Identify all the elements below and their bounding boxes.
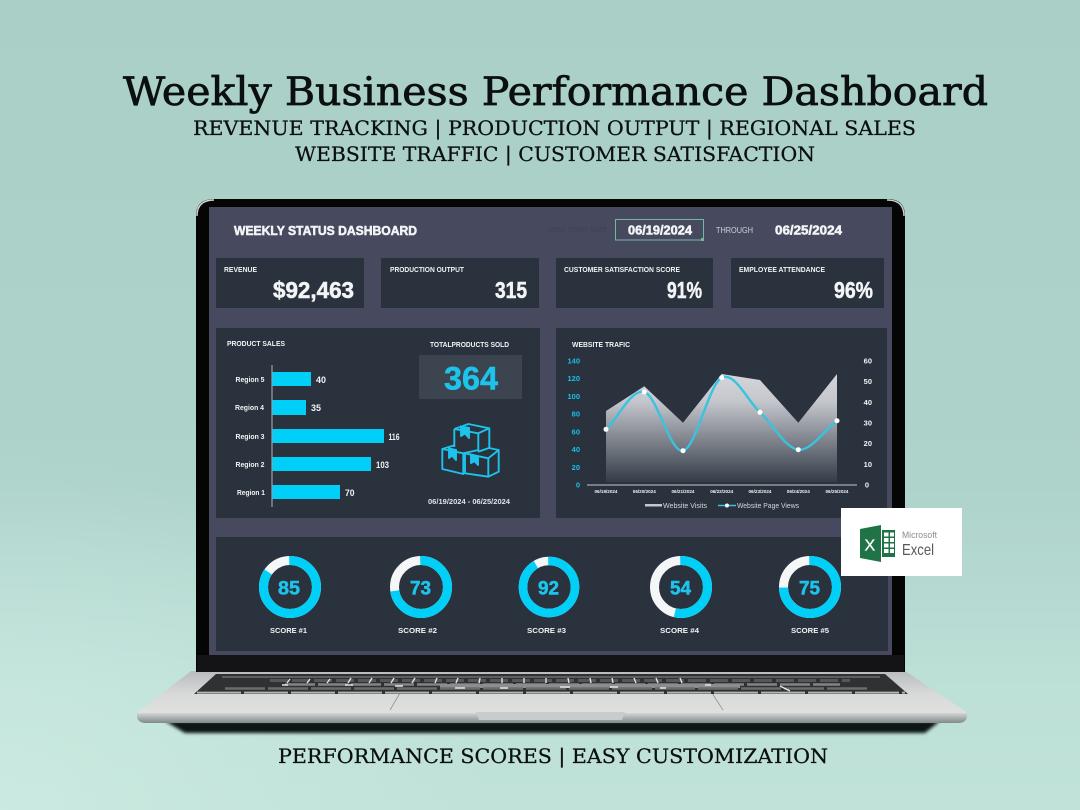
bar chart: 40 — [316, 375, 326, 386]
KPI: production output: PRODUCTION OUTPUT — [390, 267, 465, 274]
KPI: customer satisfaction: 91% — [667, 277, 702, 303]
line series: website page views — [604, 375, 840, 453]
left axis: 140 — [567, 356, 580, 366]
right axis — [864, 356, 872, 490]
left axis: 120 — [567, 374, 580, 383]
date labels: 06/21/2024 — [672, 489, 695, 494]
left axis: 40 — [572, 445, 580, 454]
KPI: revenue — [216, 258, 364, 308]
front lip — [137, 713, 967, 723]
bar chart: Region 3 — [236, 432, 264, 441]
trackpad edges — [390, 693, 723, 710]
KPI: employee attendance — [731, 258, 884, 308]
bar chart: 116 — [388, 432, 400, 443]
start date cell: 06/19/2024 — [628, 224, 692, 238]
score 1: 85 — [278, 578, 300, 600]
legend: Website Visits — [663, 501, 707, 510]
date labels — [594, 489, 849, 494]
laptop base — [137, 671, 967, 722]
left axis: 0 — [576, 480, 580, 490]
excel wordmark: Microsoft — [902, 530, 937, 540]
panel: website traffic — [556, 328, 887, 518]
score 1 — [264, 560, 316, 635]
keyboard — [194, 674, 908, 694]
bar chart: 103 — [376, 460, 389, 471]
right axis: 10 — [864, 460, 872, 469]
bar chart: Region 5 — [236, 375, 264, 384]
icon: boxes — [442, 424, 499, 477]
score 2 — [394, 560, 448, 635]
screen — [209, 207, 892, 655]
through label: THROUGH — [716, 226, 753, 235]
date labels: 06/22/2024 — [710, 489, 734, 494]
laptop shadow — [165, 721, 940, 733]
panel: scores — [216, 537, 888, 651]
date range: 06/19/2024 - 06/25/2024 — [428, 499, 510, 506]
bar chart: Region 1 — [237, 488, 265, 497]
KPI: revenue: $92,463 — [273, 277, 354, 303]
dashboard header — [234, 220, 842, 241]
bar chart — [235, 365, 400, 507]
date labels: 06/25/2024 — [826, 489, 849, 494]
heading: website traffic: WEBSITE TRAFIC — [572, 342, 630, 349]
excel badge: Excel — [902, 542, 934, 559]
title: Weekly Business Performance Dashboard — [123, 70, 988, 115]
score 3 — [523, 561, 575, 635]
score 5: SCORE #5 — [791, 626, 829, 635]
KPI: employee attendance: 96% — [834, 277, 873, 303]
left axis: 100 — [567, 392, 580, 401]
total products value — [419, 355, 522, 399]
right axis: 50 — [864, 377, 872, 386]
KPI: customer satisfaction — [556, 258, 713, 308]
right axis: 30 — [864, 418, 872, 428]
date labels: 06/20/2024 — [633, 489, 656, 494]
subtitle line 2: WEBSITE TRAFFIC | CUSTOMER SATISFACTION — [295, 142, 815, 167]
KPI: customer satisfaction: CUSTOMER SATISFACTION SCORE — [564, 267, 680, 274]
score 4 — [654, 560, 708, 635]
KPI: production output — [381, 258, 539, 308]
bottom caption: PERFORMANCE SCORES | EASY CUSTOMIZATION — [278, 744, 828, 769]
date labels: 06/24/2024 — [787, 489, 810, 494]
laptop — [137, 199, 967, 733]
faint date label: WEEK START DATE — [547, 227, 607, 234]
area series: website visits — [606, 374, 837, 482]
start date cell — [616, 220, 704, 241]
KPI: employee attendance: EMPLOYEE ATTENDANCE — [739, 267, 825, 274]
right axis: 20 — [864, 439, 872, 448]
bar chart: Region 2 — [236, 460, 264, 469]
left axis: 60 — [572, 428, 580, 436]
score 3: 92 — [538, 578, 559, 600]
date labels: 06/19/2024 — [594, 489, 618, 494]
score 4: 54 — [670, 578, 691, 600]
bar chart: Region 4 — [235, 403, 265, 412]
left axis: 80 — [572, 410, 580, 418]
right axis: 0 — [865, 480, 869, 490]
bar chart: 35 — [311, 403, 322, 414]
score 4: SCORE #4 — [660, 626, 700, 635]
score 5: 75 — [799, 578, 820, 600]
panel: product sales — [216, 328, 540, 518]
score 2: 73 — [410, 578, 431, 600]
total products value: 364 — [444, 360, 498, 396]
icon: excel logo: X — [864, 538, 876, 554]
score 5 — [784, 560, 836, 635]
legend: Website Page Views — [737, 501, 799, 510]
score 3: SCORE #3 — [527, 626, 566, 635]
bezel — [196, 199, 905, 672]
x axis — [587, 484, 857, 486]
excel badge — [841, 508, 962, 576]
trackpad notch — [476, 712, 625, 720]
bar chart: 70 — [345, 488, 354, 499]
subtitle line 1: REVENUE TRACKING | PRODUCTION OUTPUT | REGIONAL SALES — [193, 116, 916, 141]
heading: product sales: PRODUCT SALES — [227, 341, 285, 348]
score 2: SCORE #2 — [398, 626, 437, 635]
dashboard title: WEEKLY STATUS DASHBOARD — [234, 224, 417, 238]
legend — [645, 501, 799, 510]
KPI: revenue: REVENUE — [224, 267, 257, 274]
end date: 06/25/2024 — [775, 224, 842, 238]
left axis: 20 — [572, 463, 580, 472]
right axis: 60 — [864, 356, 872, 366]
left axis — [567, 356, 580, 490]
score 1: SCORE #1 — [270, 626, 307, 635]
date labels: 06/23/2024 — [748, 489, 772, 494]
total products label: TOTALPRODUCTS SOLD — [430, 342, 509, 349]
right axis: 40 — [864, 398, 872, 407]
KPI: production output: 315 — [495, 277, 527, 303]
